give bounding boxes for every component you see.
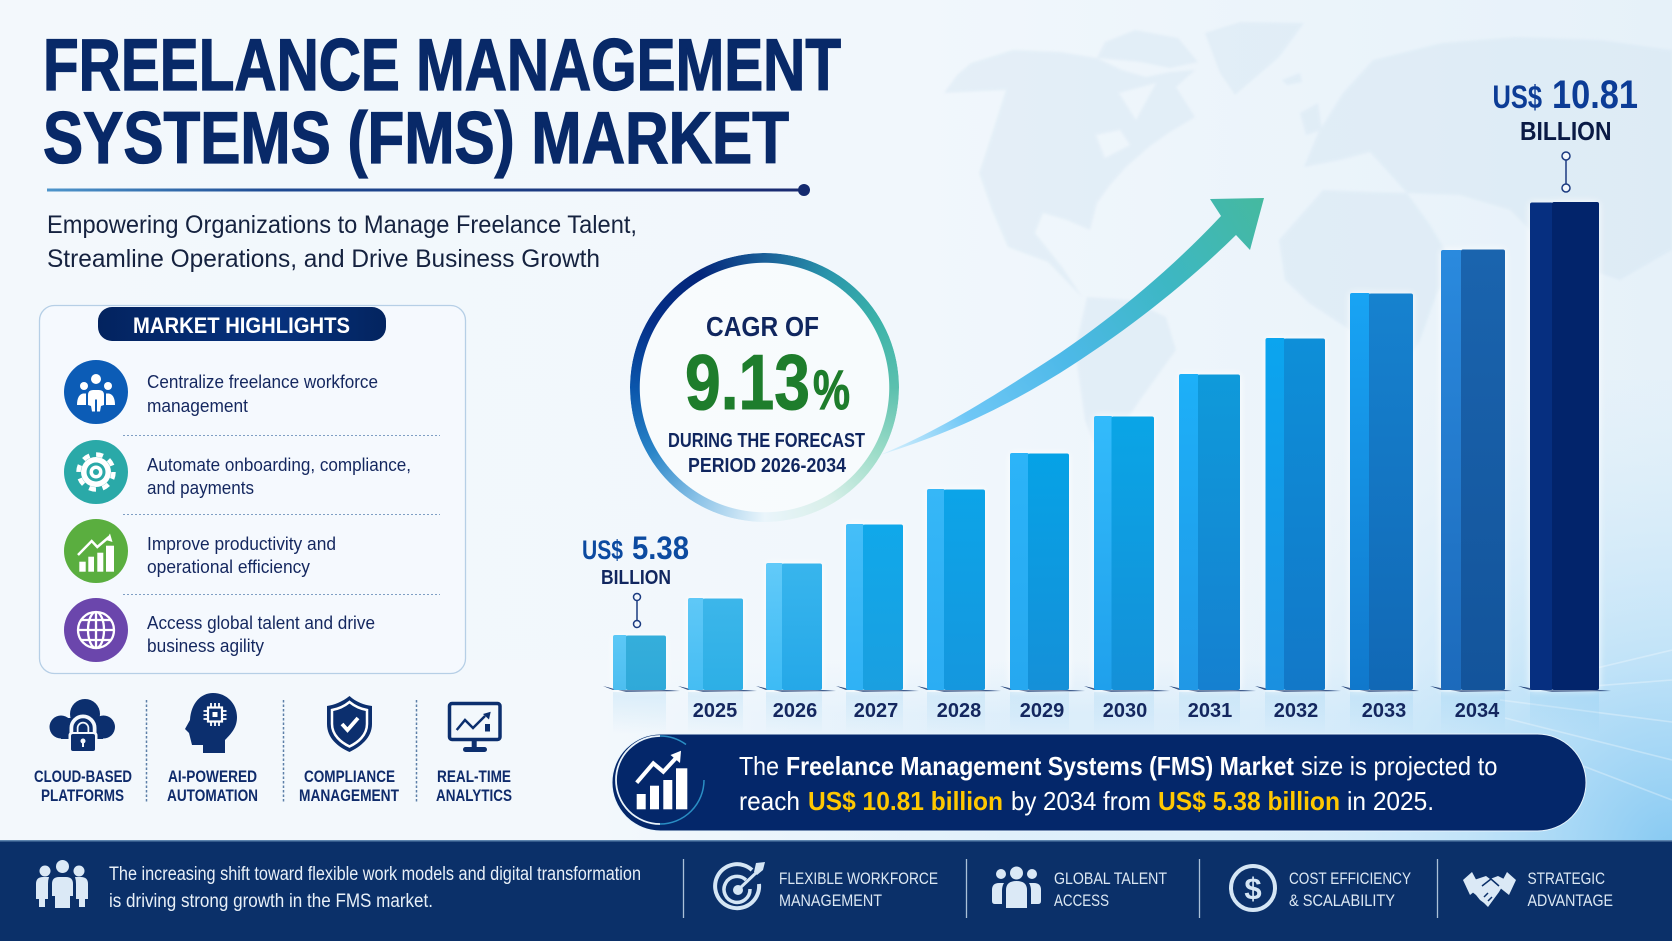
banner text: The bbox=[739, 751, 779, 781]
bar: 2027 bbox=[846, 524, 903, 690]
year labels: 2029 bbox=[1020, 700, 1064, 722]
bar: base year bbox=[613, 635, 666, 690]
banner text: reach bbox=[739, 786, 800, 816]
icon: shield bbox=[327, 696, 372, 752]
icon: people bbox=[64, 360, 128, 424]
callout: end value: BILLION bbox=[1520, 116, 1612, 146]
bar reflections bbox=[613, 692, 1599, 734]
callout: end value bbox=[1492, 73, 1638, 192]
icon: growth chart bbox=[64, 519, 128, 583]
label: global talent access: ACCESS bbox=[1054, 891, 1109, 910]
subtitle bbox=[47, 211, 637, 273]
icon: cloud lock bbox=[50, 699, 115, 753]
label: real-time analytics: ANALYTICS bbox=[436, 787, 512, 805]
label: flexible workforce management bbox=[779, 869, 938, 910]
bar: final value bbox=[1530, 202, 1599, 690]
icon: ai head bbox=[185, 693, 237, 753]
label: flexible workforce management: MANAGEMENT bbox=[779, 891, 882, 910]
label: cloud-based platforms: CLOUD-BASED bbox=[34, 768, 132, 786]
bar: 2034 bbox=[1441, 250, 1505, 690]
cagr value: % bbox=[813, 358, 850, 421]
label: compliance management bbox=[299, 768, 399, 805]
cagr circle bbox=[630, 253, 899, 522]
highlight text 1 bbox=[147, 372, 378, 416]
label: cost efficiency and scalability bbox=[1289, 869, 1411, 910]
bar bases bbox=[603, 686, 1611, 692]
icon: banner chart bbox=[616, 736, 704, 824]
summary banner bbox=[612, 734, 1586, 831]
icon: globe bbox=[64, 598, 128, 662]
callout: start value bbox=[582, 530, 689, 628]
label: cloud-based platforms: PLATFORMS bbox=[41, 787, 124, 805]
year labels: 2034 bbox=[1455, 700, 1500, 722]
footer message: is driving strong growth in the FMS market. bbox=[109, 891, 433, 912]
subtitle: Streamline Operations, and Drive Business Growth bbox=[47, 245, 600, 273]
year labels: 2026 bbox=[773, 700, 817, 722]
bar: 2033 bbox=[1350, 293, 1413, 690]
icon: gear bbox=[64, 440, 128, 504]
label: strategic advantage: STRATEGIC bbox=[1528, 869, 1605, 888]
forecast period: PERIOD 2026-2034 bbox=[688, 455, 847, 477]
banner text: US$ 10.81 billion bbox=[808, 786, 1003, 816]
panel: market highlights bbox=[40, 306, 466, 674]
label: cost efficiency and scalability: & SCALABILITY bbox=[1289, 891, 1395, 910]
year labels: 2028 bbox=[937, 700, 981, 722]
label: ai-powered automation bbox=[167, 768, 258, 805]
highlight text 3: Improve productivity and bbox=[147, 534, 336, 554]
title: FREELANCE MANAGEMENT bbox=[43, 25, 841, 106]
label: flexible workforce management: FLEXIBLE WORKFORCE bbox=[779, 869, 938, 888]
bar chart bbox=[603, 202, 1611, 734]
footer message bbox=[109, 864, 641, 912]
bar: 2032 bbox=[1266, 338, 1325, 690]
year labels: 2033 bbox=[1362, 700, 1406, 722]
label: real-time analytics bbox=[436, 768, 512, 805]
feature strip bbox=[34, 693, 512, 805]
highlight text 3: operational efficiency bbox=[147, 557, 310, 577]
banner text bbox=[739, 751, 1498, 816]
icon: target bbox=[715, 862, 765, 908]
bar: 2029 bbox=[1010, 453, 1069, 690]
label: real-time analytics: REAL-TIME bbox=[437, 768, 511, 786]
label: compliance management: COMPLIANCE bbox=[304, 768, 395, 786]
title: SYSTEMS (FMS) MARKET bbox=[43, 98, 789, 179]
title bbox=[43, 25, 841, 179]
icon: dollar: $ bbox=[1244, 871, 1262, 906]
banner text: US$ 5.38 billion bbox=[1158, 786, 1340, 816]
banner text: size is projected to bbox=[1301, 751, 1498, 781]
label: cloud-based platforms bbox=[34, 768, 132, 805]
label: global talent access bbox=[1054, 869, 1167, 910]
year labels: 2027 bbox=[854, 700, 898, 722]
highlight text 4: business agility bbox=[147, 636, 264, 656]
forecast period bbox=[668, 430, 865, 477]
highlight text 1: management bbox=[147, 396, 248, 416]
callout: start value: US$ bbox=[582, 535, 623, 565]
year labels bbox=[693, 700, 1500, 722]
label: strategic advantage: ADVANTAGE bbox=[1528, 891, 1613, 910]
highlight text 4: Access global talent and drive bbox=[147, 613, 375, 633]
bar: 2031 bbox=[1179, 374, 1240, 690]
callout: end value: 10.81 bbox=[1552, 73, 1638, 117]
banner text: in 2025. bbox=[1347, 786, 1434, 816]
panel heading: MARKET HIGHLIGHTS bbox=[133, 313, 350, 338]
footer bar bbox=[0, 840, 1672, 941]
banner text: Freelance Management Systems (FMS) Market bbox=[786, 751, 1294, 781]
year labels: 2032 bbox=[1274, 700, 1318, 722]
world map watermark bbox=[944, 22, 1672, 460]
highlight text 2: and payments bbox=[147, 478, 254, 498]
footer message: The increasing shift toward flexible work models and digital transformation bbox=[109, 864, 641, 885]
growth arrow bbox=[880, 198, 1264, 455]
floor light rays bbox=[1500, 650, 1672, 800]
forecast period: DURING THE FORECAST bbox=[668, 430, 865, 452]
callout: start value: 5.38 bbox=[632, 530, 689, 566]
label: global talent access: GLOBAL TALENT bbox=[1054, 869, 1167, 888]
label: strategic advantage bbox=[1528, 869, 1613, 910]
icon: handshake bbox=[1463, 872, 1516, 907]
subtitle: Empowering Organizations to Manage Freelance Talent, bbox=[47, 211, 637, 239]
bar: 2030 bbox=[1094, 416, 1154, 690]
label: ai-powered automation: AUTOMATION bbox=[167, 787, 258, 805]
year labels: 2025 bbox=[693, 700, 737, 722]
highlight text 4 bbox=[147, 613, 375, 656]
label: compliance management: MANAGEMENT bbox=[299, 787, 399, 805]
label: cost efficiency and scalability: COST EFFICIENCY bbox=[1289, 869, 1411, 888]
year labels: 2031 bbox=[1188, 700, 1232, 722]
title divider bbox=[47, 184, 810, 196]
bar: 2026 bbox=[766, 563, 822, 690]
icon: monitor bbox=[450, 704, 500, 752]
cagr value: 9.13 bbox=[685, 338, 810, 426]
highlight text 3 bbox=[147, 534, 336, 577]
cagr label: CAGR OF bbox=[706, 311, 819, 342]
bar: 2028 bbox=[927, 489, 985, 690]
icon: team bbox=[36, 860, 88, 908]
icon: dollar bbox=[1231, 866, 1275, 910]
label: ai-powered automation: AI-POWERED bbox=[168, 768, 257, 786]
callout: start value: BILLION bbox=[601, 567, 671, 589]
callout: end value: US$ bbox=[1492, 79, 1542, 115]
highlight text 2 bbox=[147, 455, 411, 498]
bar: 2025 bbox=[688, 598, 743, 690]
year labels: 2030 bbox=[1103, 700, 1147, 722]
icon: global talent bbox=[992, 866, 1041, 908]
highlight text 1: Centralize freelance workforce bbox=[147, 372, 378, 392]
banner text: by 2034 from bbox=[1011, 786, 1151, 816]
highlight text 2: Automate onboarding, compliance, bbox=[147, 455, 411, 475]
panel heading bbox=[98, 307, 386, 341]
